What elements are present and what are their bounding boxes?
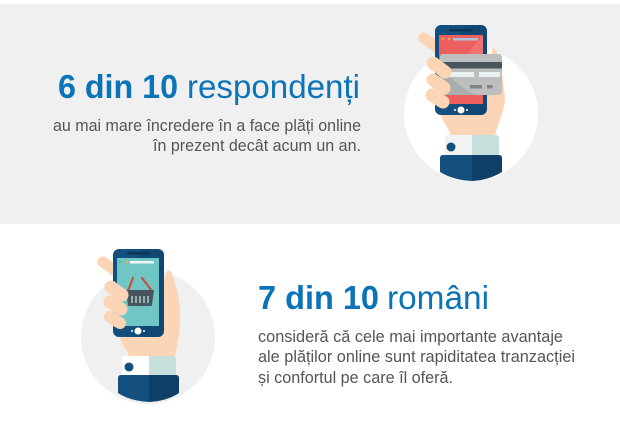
icon: hand holding phone and credit card	[404, 25, 538, 181]
heading suffix: respondenți: respondenți	[187, 68, 360, 105]
text block: second statement	[258, 328, 575, 387]
text block: second statement: consideră că cele mai importante avantaje	[258, 328, 563, 346]
panel: top grey band	[0, 4, 620, 224]
text block: second statement: și confortul pe care îl oferă.	[258, 369, 453, 387]
text block: first statement	[53, 117, 361, 155]
heading: 7 din 10: 7 din 10	[258, 279, 379, 316]
heading: 6 din 10: 6 din 10	[58, 68, 178, 105]
text block: first statement: au mai mare încredere în a face plăți online	[53, 117, 361, 135]
text block: first statement: în prezent decât acum un an.	[152, 137, 361, 155]
text block: second statement: ale plăților online sunt rapiditatea tranzacției	[258, 348, 575, 366]
heading suffix: români: români	[387, 279, 489, 316]
icon: hand holding phone with shopping basket	[81, 249, 215, 404]
